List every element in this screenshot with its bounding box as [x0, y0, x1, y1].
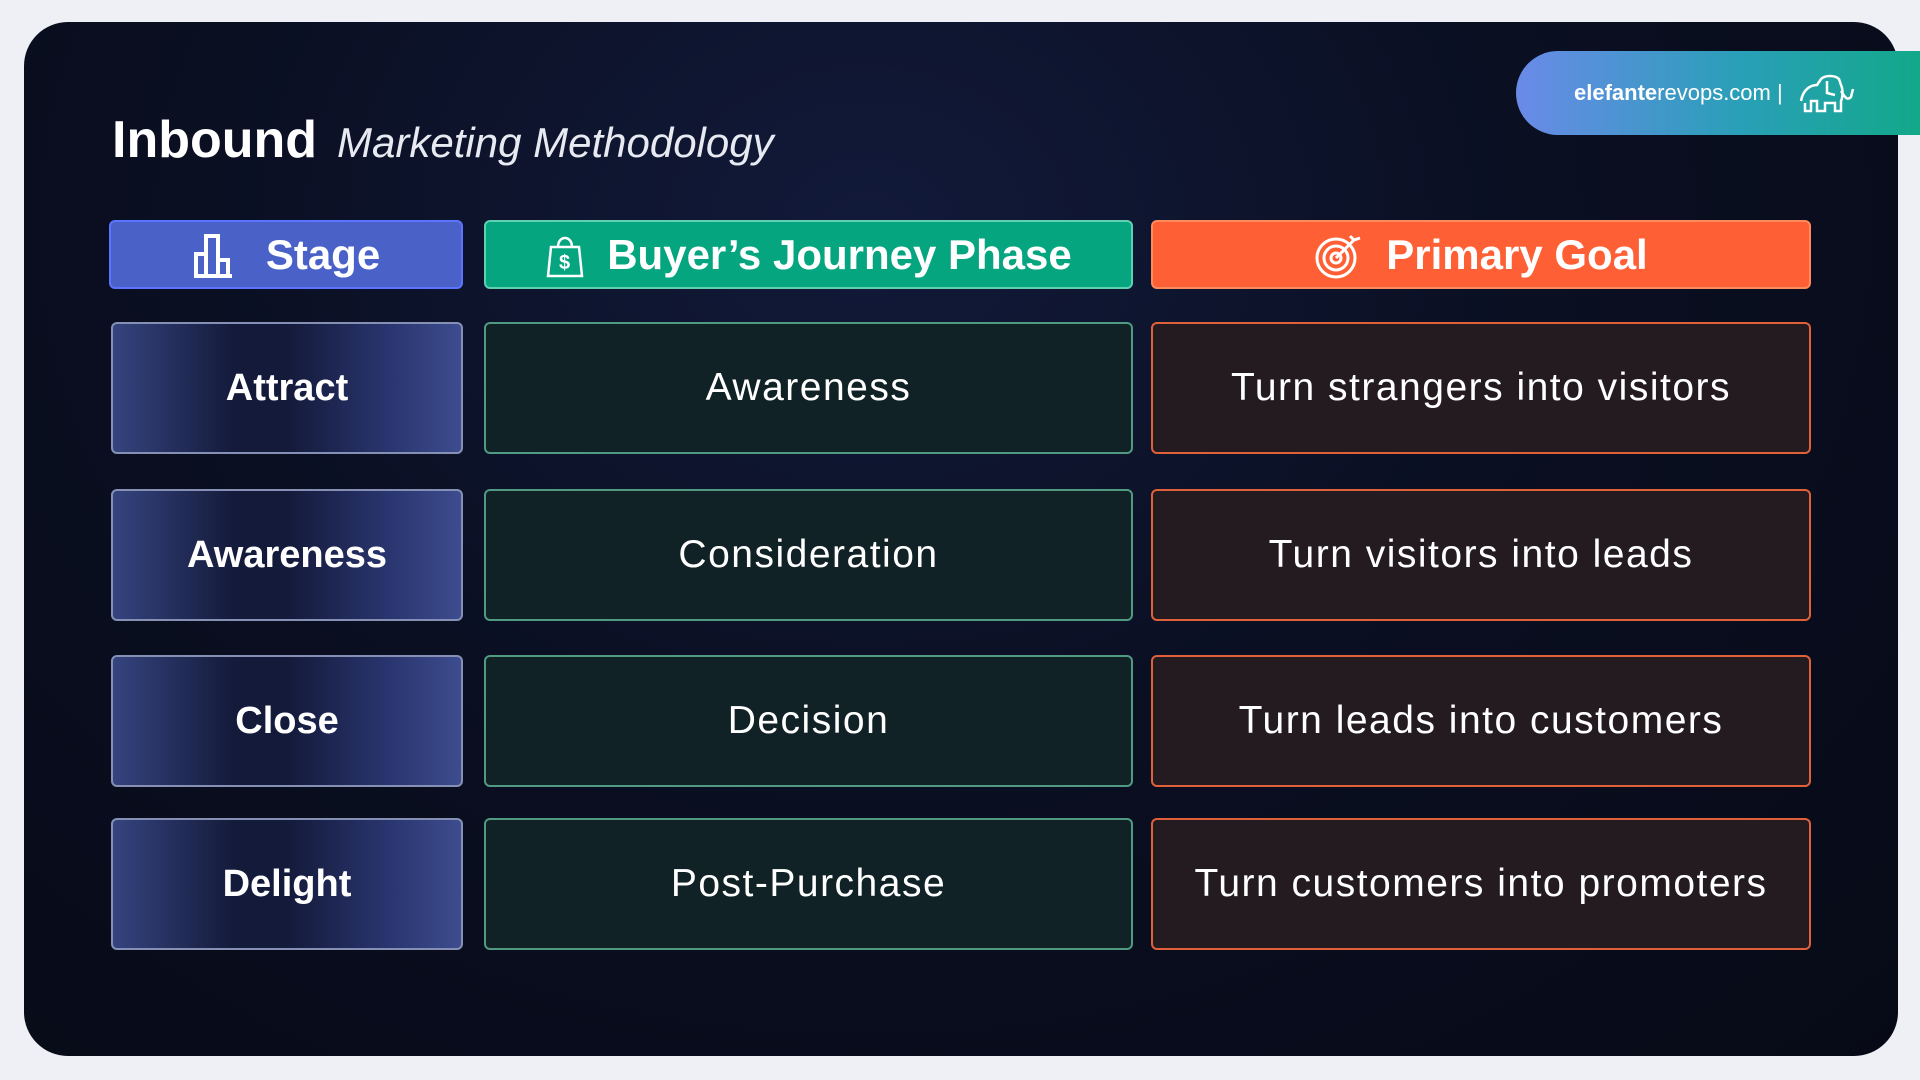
icon: target: [1316, 235, 1360, 278]
header: Stage: [109, 220, 463, 289]
header: Primary Goal: Primary Goal: [1386, 230, 1648, 278]
row 3 stage: Close: [235, 700, 339, 742]
row 3 phase: Decision: [728, 699, 889, 742]
title: Inbound Marketing Methodology: [112, 111, 774, 169]
icon: elephant: [1800, 74, 1854, 112]
icon: shopping bag: [546, 236, 584, 278]
row 3 goal: Turn leads into customers: [1239, 699, 1723, 742]
row 1 stage: Attract: [226, 366, 348, 408]
row 4 goal: Turn customers into promoters: [1194, 862, 1768, 905]
logo badge: [1516, 51, 1920, 135]
icon: bar chart: [194, 234, 232, 278]
logo badge: elefanterevops.com |: [1574, 80, 1783, 105]
header: Buyer's Journey Phase: [484, 220, 1133, 289]
row 3 stage: [111, 655, 463, 787]
row 4 phase: [484, 818, 1133, 950]
header: Stage: Stage: [266, 230, 380, 278]
row 4 phase: Post-Purchase: [671, 862, 946, 905]
header: Primary Goal: [1151, 220, 1811, 289]
row 3 goal: [1151, 655, 1811, 787]
row 1 goal: Turn strangers into visitors: [1231, 366, 1731, 409]
row 2 stage: Awareness: [187, 534, 387, 576]
row 2 phase: [484, 489, 1133, 621]
row 2 phase: Consideration: [678, 533, 939, 576]
row 1 phase: [484, 322, 1133, 454]
row 2 goal: Turn visitors into leads: [1269, 533, 1693, 576]
row 3 phase: [484, 655, 1133, 787]
row 4 goal: [1151, 818, 1811, 950]
row 1 stage: [111, 322, 463, 454]
row 1 goal: [1151, 322, 1811, 454]
row 2 stage: [111, 489, 463, 621]
header: Buyer's Journey Phase: Buyer’s Journey Phase: [607, 230, 1072, 278]
row 1 phase: Awareness: [706, 366, 911, 409]
row 2 goal: [1151, 489, 1811, 621]
row 4 stage: [111, 818, 463, 950]
icon: shopping bag: $: [559, 252, 570, 274]
row 4 stage: Delight: [223, 862, 351, 904]
